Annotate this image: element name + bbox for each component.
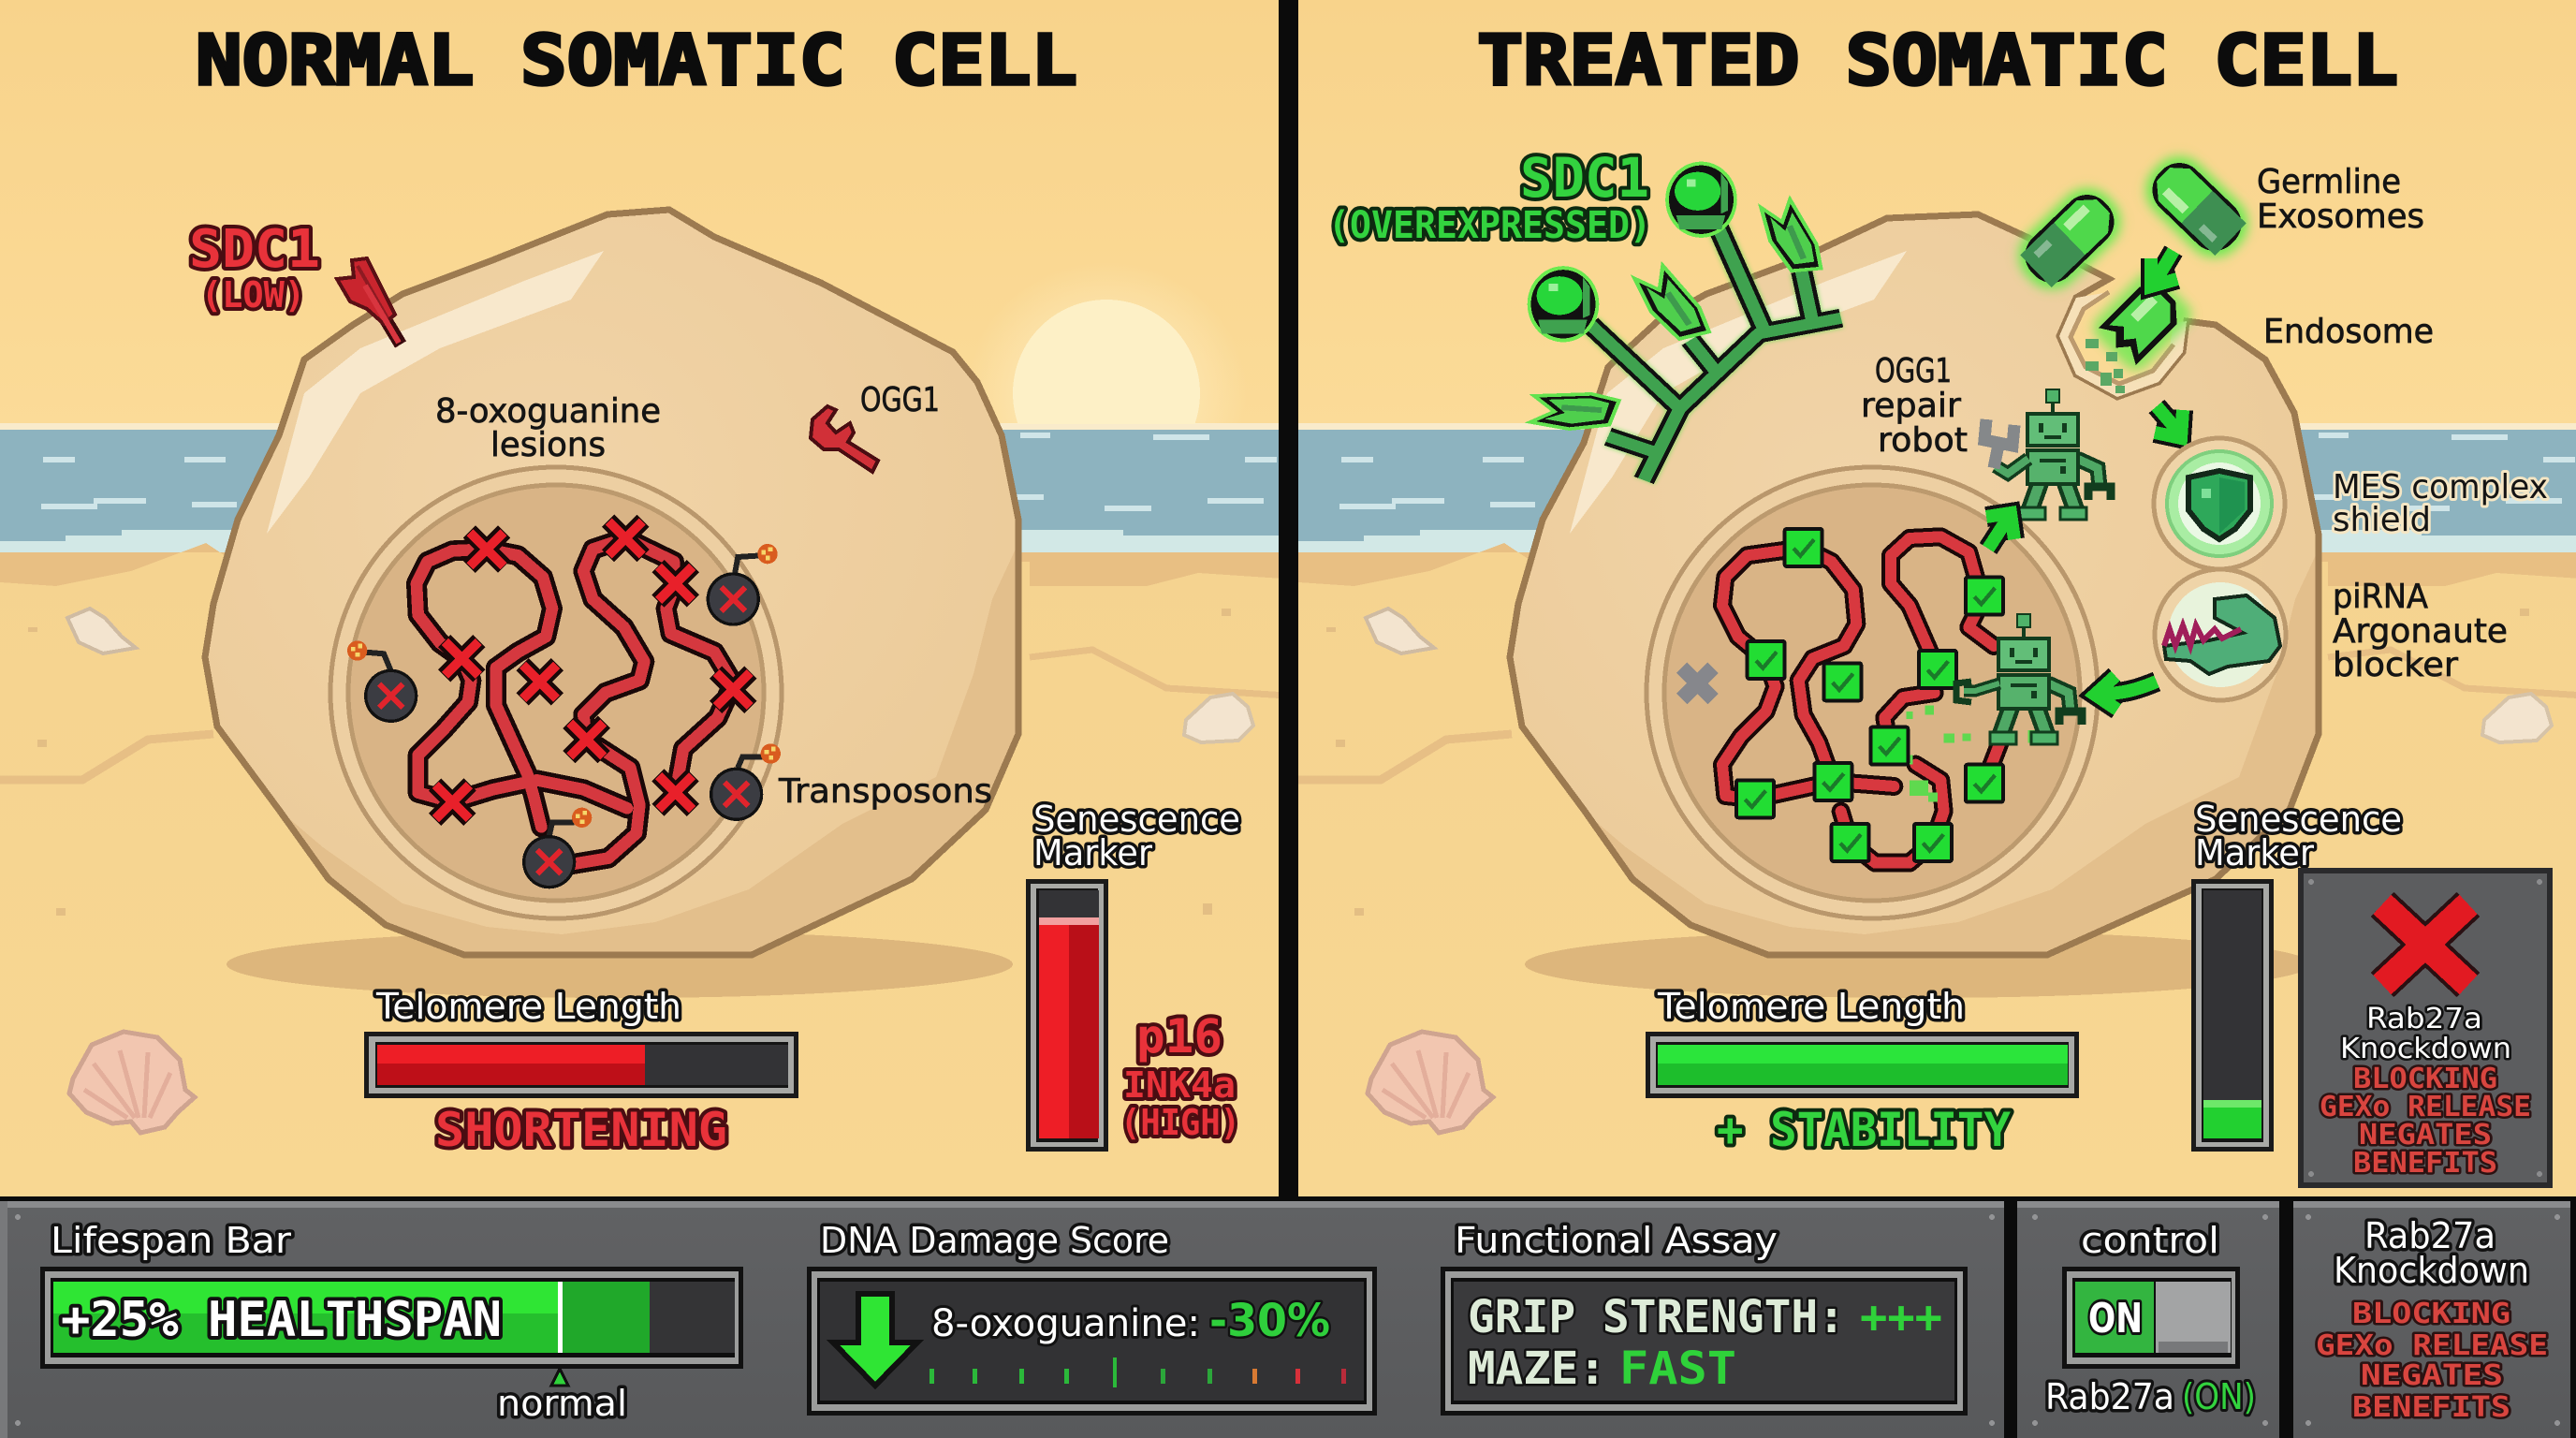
label: Rab27a on	[2045, 1376, 2256, 1417]
label: senescence marker: Marker	[2195, 832, 2314, 873]
toggle switch	[2062, 1267, 2240, 1369]
grip strength: GRIP STRENGTH:	[1468, 1291, 1845, 1343]
label: control: control	[2081, 1220, 2219, 1261]
icon: low SDC1 receptor	[337, 258, 401, 345]
transposon bombs	[347, 544, 781, 888]
robot repairing DNA	[1956, 614, 2082, 744]
warning text: BLOCKING	[2353, 1063, 2497, 1095]
warning text: BENEFITS	[2353, 1147, 2497, 1180]
label: germline exosomes: Exosomes	[2257, 198, 2424, 236]
label: lesions: lesions	[490, 426, 606, 464]
label: MES complex shield: MES complex	[2333, 468, 2548, 506]
label: transposons: Transposons	[778, 772, 992, 811]
neutralised transposon	[1682, 668, 1713, 699]
sun	[988, 283, 1223, 423]
DNA damage display	[807, 1267, 1377, 1416]
title: treated somatic cell: TREATED SOMATIC CELL	[1477, 21, 2398, 101]
damage scale ticks	[929, 1357, 1346, 1387]
label: SDC1 low: SDC1	[189, 219, 320, 280]
label: germline exosomes	[2258, 167, 2423, 228]
label: SDC1 low: (LOW)	[201, 274, 305, 315]
label: MES complex shield	[2333, 468, 2548, 539]
DNA damage display: -30%	[1209, 1295, 1330, 1347]
label: DNA damage score: DNA Damage Score	[820, 1220, 1169, 1261]
OGG1 repair robot	[1984, 389, 2111, 520]
label: piRNA Argonaute blocker	[2333, 578, 2508, 684]
label: functional assay: Functional Assay	[1455, 1220, 1778, 1261]
warning text: Knockdown	[2340, 1033, 2511, 1065]
knockdown warning: BLOCKING	[2352, 1298, 2510, 1330]
label: endosome: Endosome	[2263, 313, 2434, 351]
damaged DNA strands with lesions	[347, 521, 781, 888]
label: shortening: SHORTENING	[435, 1103, 727, 1157]
telomere bar: shortening	[364, 1032, 798, 1098]
functional assay display: FAST	[1619, 1343, 1736, 1395]
warning text: NEGATES	[2359, 1119, 2492, 1152]
icon: OGG1 wrench	[811, 406, 878, 472]
label: stability: + STABILITY	[1717, 1103, 2011, 1157]
senescence bar: low	[2191, 879, 2274, 1152]
label: senescence marker: Senescence	[1033, 799, 1240, 840]
central divider	[1279, 0, 1297, 1196]
germline exosome capsules	[2007, 145, 2260, 393]
knockdown warning	[2316, 1298, 2548, 1424]
panel: treated somatic cell	[1298, 0, 2576, 1196]
cell body with endosome indent	[1510, 214, 2321, 955]
label: piRNA Argonaute blocker: Argonaute	[2333, 612, 2508, 651]
warning text	[2320, 1003, 2531, 1180]
knockdown heading	[2334, 1215, 2529, 1291]
arrow: endosome to shield	[2155, 406, 2183, 438]
check marks	[1736, 529, 2003, 861]
label: SDC1 overexpressed	[1328, 146, 1651, 247]
label: OGG1 repair robot	[1863, 357, 1968, 452]
label: lesions	[437, 397, 659, 457]
label: senescence marker: Senescence	[2195, 799, 2402, 840]
label: OGG1 repair robot: OGG1	[1875, 352, 1952, 390]
knockdown heading: Knockdown	[2334, 1250, 2529, 1291]
panel: Rab27a knockdown warning	[2298, 868, 2553, 1188]
arrow: exosome into endosome	[2151, 251, 2177, 286]
panel: readouts	[0, 1201, 2004, 1438]
senescence bar: high	[1026, 879, 1108, 1152]
arrow: DNA to robot	[1986, 513, 2014, 549]
arrow: argonaute to nucleus	[2095, 676, 2157, 710]
knockdown heading: Rab27a	[2364, 1215, 2496, 1256]
label: Rab27a on: (ON)	[2182, 1376, 2256, 1417]
panel: normal somatic cell	[0, 0, 1310, 1196]
lifespan bar	[40, 1267, 743, 1369]
normal marker: normal	[497, 1383, 627, 1424]
label: OGG1: OGG1	[860, 381, 940, 419]
maze result: MAZE:	[1468, 1343, 1606, 1395]
panel: Rab27a knockdown readout	[2293, 1201, 2570, 1438]
label: MES complex shield: shield	[2333, 501, 2431, 539]
label: senescence marker	[1033, 799, 1240, 873]
icon: red X	[2382, 904, 2468, 985]
telomere bar: stable	[1646, 1032, 2079, 1098]
label: lesions: 8-oxoguanine	[435, 392, 661, 431]
panel: control switch	[2017, 1201, 2279, 1438]
piRNA Argonaute blocker	[2155, 569, 2286, 700]
warning text: Rab27a	[2366, 1003, 2482, 1035]
lesion X marks	[435, 521, 751, 819]
label: senescence marker: Marker	[1033, 832, 1152, 873]
label: piRNA Argonaute blocker: piRNA	[2333, 578, 2428, 616]
label: senescence marker	[2195, 799, 2402, 873]
MES complex shield	[2154, 438, 2285, 569]
repaired DNA strands with checks	[1682, 529, 2038, 863]
label: p16 INK4a high: p16	[1136, 1009, 1222, 1064]
label: p16 INK4a high	[1120, 1009, 1240, 1143]
label: OGG1 repair robot: repair	[1861, 387, 1961, 425]
title: normal somatic cell: NORMAL SOMATIC CELL	[196, 21, 1077, 101]
repair sparks	[1903, 705, 2038, 802]
nucleus	[330, 467, 782, 918]
cell body	[205, 210, 1018, 955]
label: Rab27a on: Rab27a	[2045, 1376, 2174, 1417]
knockdown warning: BENEFITS	[2352, 1391, 2510, 1424]
label: germline exosomes: Germline	[2257, 163, 2401, 201]
exosome entering endosome	[2086, 267, 2197, 393]
label: OGG1 repair robot: robot	[1878, 421, 1968, 460]
knockdown warning: GEXo RELEASE	[2316, 1329, 2548, 1362]
icon: green down arrow	[833, 1294, 917, 1386]
lifespan value: +25% HEALTHSPAN	[61, 1292, 502, 1348]
beach scene background	[0, 0, 1310, 1196]
label: lifespan bar: Lifespan Bar	[51, 1220, 291, 1261]
toggle switch: ON	[2088, 1295, 2143, 1343]
label: SDC1 overexpressed: SDC1	[1520, 146, 1649, 210]
nucleus	[1647, 467, 2098, 918]
label: p16 INK4a high: (HIGH)	[1120, 1102, 1240, 1143]
8-oxoguanine value: 8-oxoguanine:	[931, 1302, 1200, 1345]
label: SDC1 overexpressed: (OVEREXPRESSED)	[1328, 204, 1651, 247]
warning text: GEXo RELEASE	[2320, 1091, 2531, 1123]
knockdown warning: NEGATES	[2361, 1359, 2503, 1392]
label: telomere length: Telomere Length	[1657, 986, 1965, 1027]
label: p16 INK4a high: INK4a	[1123, 1064, 1236, 1106]
label: piRNA Argonaute blocker: blocker	[2333, 646, 2458, 684]
SDC1 overexpressed branching receptor	[1519, 162, 1841, 480]
functional assay display	[1441, 1267, 1968, 1416]
beach scene background	[1298, 0, 2576, 1196]
label: SDC1 low	[189, 219, 320, 315]
functional assay display: +++	[1860, 1291, 1942, 1343]
label: telomere length: Telomere Length	[375, 986, 681, 1027]
